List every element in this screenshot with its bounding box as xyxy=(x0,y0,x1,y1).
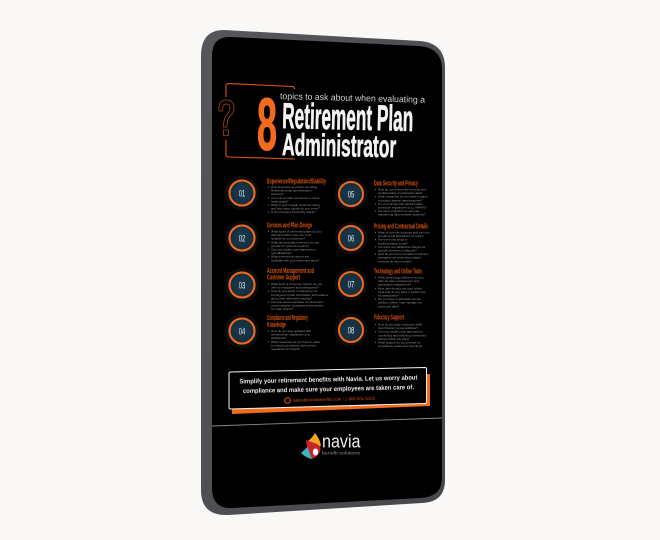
topic 02: available with your retirement plans? xyxy=(271,258,320,262)
topic 01 xyxy=(223,174,326,214)
header: Retirement Plan xyxy=(282,95,414,139)
topic 02: recordkeeping? xyxy=(271,251,292,255)
topic 02: offer and which ones are most xyxy=(271,233,311,237)
icon: phone xyxy=(285,398,290,403)
topic 07 xyxy=(333,266,426,308)
topic 02: What administration services do you xyxy=(271,240,320,244)
topic 02: provide for retirement plans? xyxy=(271,244,310,248)
call to action box: compliance and make sure your employees are taken care of. xyxy=(243,384,414,395)
topic 03: Can you share examples of successful xyxy=(271,300,323,304)
topic 03: What level of customer support do you xyxy=(271,282,323,286)
topic 06: What is your fee structure and can you xyxy=(378,230,430,234)
topic 01: How long have you been providing xyxy=(271,185,317,189)
topic 07: offer for plan management and xyxy=(378,279,419,283)
topic 04: How do you stay updated with xyxy=(271,329,311,333)
topic 05: What measures do you have in place xyxy=(378,195,428,199)
topic 02: What types of retirement plans do you xyxy=(271,230,322,234)
subtitle: topics to ask about when evaluating a xyxy=(280,91,425,105)
topic 08: How do you help employers fulfill xyxy=(378,322,422,326)
contact details: sales@naviabenefits.com / 1-866-831-6133 xyxy=(293,396,376,402)
topic 03: employees in plan information and features xyxy=(271,293,329,297)
logo mark xyxy=(308,433,321,447)
topic 07: What technology platforms do you xyxy=(378,276,424,280)
white outlined panel xyxy=(229,368,426,409)
topic 08: What support do you provide for xyxy=(378,340,421,344)
topic 08 xyxy=(333,312,426,348)
topic 02: 02 xyxy=(239,234,245,244)
topic 07: plans and data? xyxy=(378,304,400,308)
topic 01: Is the company financially stable? xyxy=(271,210,316,214)
topic 06: 06 xyxy=(348,234,354,244)
topic 03: Account Management and xyxy=(267,268,314,275)
topic 03: 03 xyxy=(239,280,245,292)
topic 05: protection regulations (e.g., HIPAA)? xyxy=(378,206,427,210)
topic 03: How do you assist in educating our xyxy=(271,289,318,293)
topic 08: monitoring and selecting investment xyxy=(378,333,426,337)
topic 04: What measures do you have in place xyxy=(271,340,321,344)
topic 01: 01 xyxy=(239,188,245,200)
topic 03: about their retirement savings? xyxy=(271,296,313,300)
topic 03: offer to employers and participants? xyxy=(271,286,319,290)
topic 05 xyxy=(333,176,428,217)
topic 04: relevant plan regulations and xyxy=(271,333,310,337)
topic 02: What investment options are xyxy=(271,255,309,259)
topic 01: testimonials? xyxy=(271,199,289,203)
topic 06: provide a full breakdown of costs? xyxy=(378,234,424,238)
topic 05: transferring data between systems? xyxy=(378,213,426,217)
topic 04: Compliance and Regulatory xyxy=(267,315,308,322)
logo tagline: benefit solutions xyxy=(322,450,361,456)
topic 05: Do you comply with relevant data xyxy=(378,202,423,206)
topic 01: Can you provide references or client xyxy=(271,196,319,200)
topic 04: 04 xyxy=(239,326,245,338)
navia logo xyxy=(301,430,361,459)
topic 04: to ensure compliance with current xyxy=(271,343,316,347)
topic 06 xyxy=(333,220,430,263)
topic 03 xyxy=(223,266,329,311)
topic 01: services? xyxy=(271,192,284,196)
topic 08: their fiduciary responsibilities? xyxy=(378,326,418,330)
topic 03: for other clients? xyxy=(271,307,294,311)
header: 8 xyxy=(257,83,277,166)
orange offset shadow xyxy=(232,374,430,414)
topic 06: averages and what value-added xyxy=(378,256,421,260)
topic 05: Are there protocols for securely xyxy=(378,209,420,213)
bracket frame xyxy=(226,84,295,159)
topic 06: How do your fees compare to industry xyxy=(378,252,429,256)
topic 01: and how many clients do you serve? xyxy=(271,207,320,211)
divider xyxy=(212,418,442,426)
topic 07: participant engagement? xyxy=(378,283,411,287)
topic 06: Are there any additional charges for xyxy=(378,245,426,249)
topic 07: Do you have a dedicated secure xyxy=(378,297,421,301)
topic 01: Experience/Reputation/Stability xyxy=(267,178,326,186)
topic 07: for participants? xyxy=(378,294,400,298)
topic 03: Customer Support xyxy=(267,274,300,282)
topic 05: How do you ensure the security and xyxy=(378,188,426,192)
topic 08: options within the plan? xyxy=(378,337,410,341)
topic 03: communication strategies implemented xyxy=(271,304,323,308)
header xyxy=(219,83,425,166)
logo wordmark: navia xyxy=(322,430,361,452)
topic 08: Fiduciary Support xyxy=(374,314,404,322)
topic 05: to protect against data breaches? xyxy=(378,198,423,202)
title line 2: Administrator xyxy=(282,127,397,164)
topic 08: Can you explain your approach to xyxy=(378,330,423,334)
topic 06: implementation costs? xyxy=(378,241,408,245)
topic 04: regulations and laws? xyxy=(271,347,300,351)
topic 05: Data Security and Privacy xyxy=(374,180,418,188)
topic 02: Can you explain your approach to xyxy=(271,248,316,252)
topic 07: How user-friendly are your online xyxy=(378,286,422,290)
topic 07: Technology and Online Tools xyxy=(374,268,422,276)
topic 04: guidelines? xyxy=(271,336,287,340)
topic 08: compliance audits and reporting? xyxy=(378,344,423,348)
topic 05: confidentiality of participant data? xyxy=(378,191,423,195)
topic 07: 07 xyxy=(348,280,354,290)
topic 08: 08 xyxy=(348,326,354,336)
topic 01: Retirement plan administration xyxy=(271,189,312,193)
tablet device xyxy=(201,30,445,515)
topic 02: Services and Plan Design xyxy=(267,222,312,230)
topic 02: suitable for our business? xyxy=(271,237,306,241)
topic 06: Are there any setup or xyxy=(378,238,408,242)
icon: question mark xyxy=(219,100,234,136)
topic 01: What is your Google customer rating, xyxy=(271,203,321,207)
topic 07: tools and do you have a mobile app xyxy=(378,290,426,294)
topic 04 xyxy=(223,312,321,351)
topic 06: Pricing and Contractual Details xyxy=(374,224,428,230)
topic 07: platform where I can manage our xyxy=(378,301,422,305)
topic 06: services do they include? xyxy=(378,259,412,263)
call to action box xyxy=(229,368,430,414)
topic 05: 05 xyxy=(348,190,354,200)
topic 04: Knowledge xyxy=(267,322,286,329)
topic 06: specific services or features? xyxy=(378,248,417,252)
call to action text: Simplify your retirement benefits with Navia. Let us worry about xyxy=(239,374,418,385)
topic 02 xyxy=(223,219,322,262)
